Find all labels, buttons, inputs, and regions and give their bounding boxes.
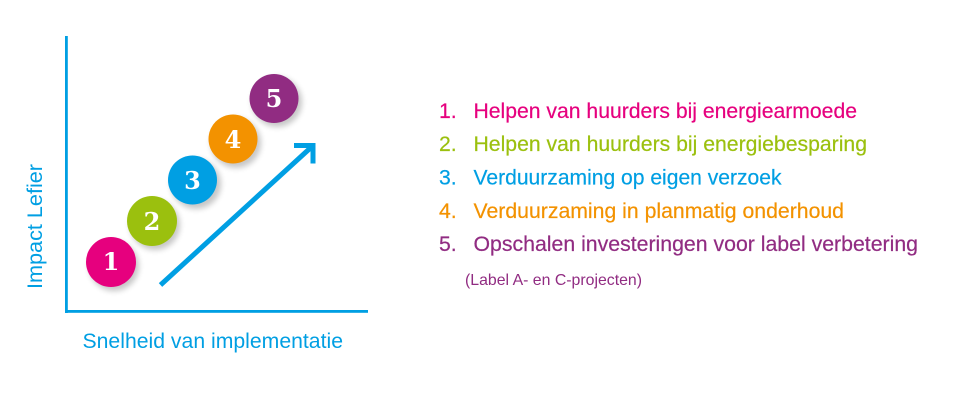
list item 5: 5. bbox=[439, 233, 457, 256]
step circle 3: 3 bbox=[184, 166, 201, 195]
step circle 2: 2 bbox=[144, 207, 160, 236]
x axis label: Snelheid van implementatie bbox=[82, 330, 343, 353]
list item 1: 1. bbox=[439, 100, 457, 123]
list item 4: Verduurzaming in planmatig onderhoud bbox=[474, 200, 844, 223]
list item 3: Verduurzaming op eigen verzoek bbox=[474, 166, 782, 190]
step circle 2 bbox=[127, 196, 180, 250]
step circle 4 bbox=[208, 114, 261, 168]
diagonal arrow bbox=[160, 146, 313, 285]
step circle 3 bbox=[168, 156, 221, 209]
step circle 5: 5 bbox=[266, 84, 282, 113]
step circle 4: 4 bbox=[225, 125, 241, 154]
list item 1: Helpen van huurders bij energiearmoede bbox=[474, 100, 857, 123]
list item 5: Opschalen investeringen voor label verbetering bbox=[474, 233, 918, 256]
list item 3: 3. bbox=[439, 166, 457, 190]
list item 2: 2. bbox=[439, 133, 457, 156]
list item 4: 4. bbox=[439, 200, 457, 223]
chart axes bbox=[65, 36, 368, 313]
step circle 1 bbox=[86, 237, 139, 291]
list footnote: (Label A- en C-projecten) bbox=[465, 272, 642, 289]
step circle 5 bbox=[250, 74, 302, 127]
list item 2: Helpen van huurders bij energiebesparing bbox=[474, 133, 867, 156]
y axis label: Impact Lefier bbox=[23, 164, 47, 289]
step circle 1: 1 bbox=[103, 247, 119, 276]
